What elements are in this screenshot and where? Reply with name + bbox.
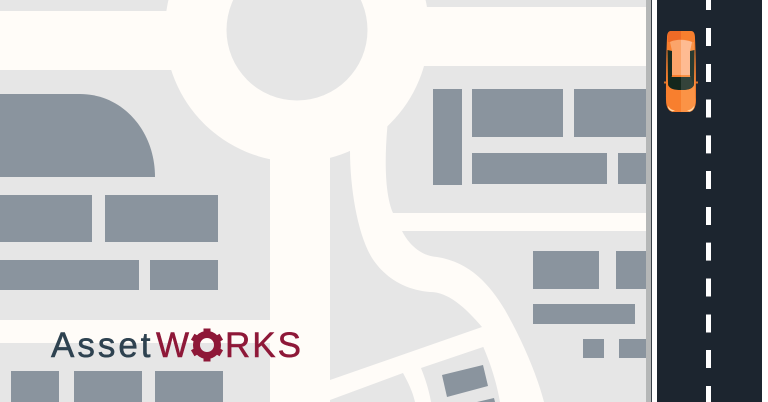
logo text: RKS: RKS bbox=[225, 326, 303, 365]
road: curved south-east bbox=[350, 120, 544, 402]
windshield and cabin roof bbox=[670, 40, 692, 75]
car mirrors bbox=[664, 82, 698, 84]
side window right bbox=[690, 50, 694, 85]
headlight highlights bbox=[668, 106, 694, 112]
car body bbox=[666, 31, 696, 112]
roundabout center island bbox=[226, 0, 368, 100]
lane dashes bbox=[706, 0, 711, 402]
car roof light half bbox=[681, 40, 692, 75]
road: upper right bbox=[400, 7, 647, 66]
roundabout ring bbox=[165, 0, 429, 162]
road: vertical south bbox=[270, 130, 330, 402]
car body: shaded front bbox=[668, 31, 681, 42]
logo text: W: W bbox=[156, 326, 189, 365]
logo: AssetWorks bbox=[51, 326, 303, 365]
icon: orange car bbox=[664, 31, 698, 112]
icon: gear replacing O bbox=[191, 328, 223, 362]
road: upper left bbox=[0, 11, 200, 70]
road edge: shoulder bbox=[646, 0, 768, 402]
rear window bbox=[668, 77, 694, 90]
car body: light side bbox=[681, 42, 695, 112]
side window left bbox=[668, 50, 672, 85]
buildings: blocks bbox=[0, 89, 647, 402]
road: east branch bbox=[392, 213, 647, 231]
building: dome bbox=[0, 94, 155, 177]
road: lower left bbox=[0, 320, 270, 343]
rear window light half bbox=[681, 77, 694, 90]
road: diagonal bbox=[330, 327, 492, 402]
panel: asphalt road bbox=[657, 0, 762, 402]
logo text: Asset: Asset bbox=[51, 326, 154, 365]
